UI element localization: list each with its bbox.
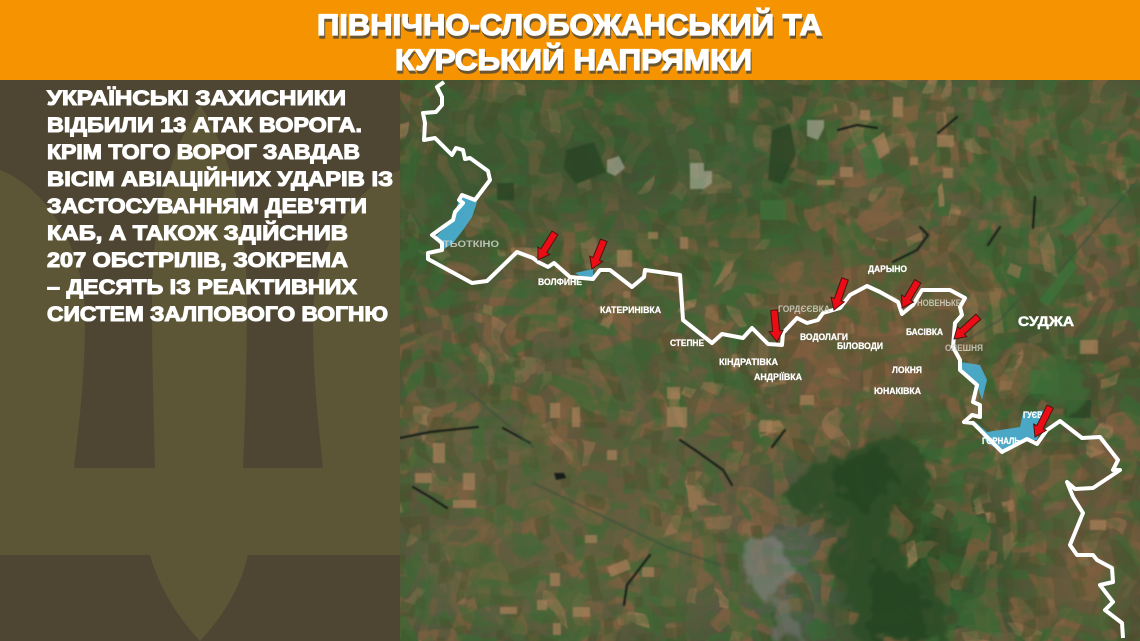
place labels: БІЛОВОДИ xyxy=(837,341,883,351)
place labels: ВОЛФИНЕ xyxy=(538,277,582,287)
water bodies xyxy=(435,195,1047,452)
rivers xyxy=(400,117,1138,605)
place labels: ОЛЕШНЯ xyxy=(945,343,983,354)
panel: text background with trident emblem xyxy=(0,80,400,641)
title: ПІВНІЧНО-СЛОБОЖАНСЬКИЙ ТА xyxy=(317,8,822,42)
place labels: ЮНАКІВКА xyxy=(874,386,921,396)
place labels: ГОРДЄЄВКА xyxy=(778,304,830,315)
body text: ЗАСТОСУВАННЯМ ДЕВ'ЯТИ xyxy=(47,195,367,218)
place labels xyxy=(443,239,1074,446)
body text: – ДЕСЯТЬ ІЗ РЕАКТИВНИХ xyxy=(47,276,357,299)
body text: ВІДБИЛИ 13 АТАК ВОРОГА. xyxy=(47,114,362,137)
place labels: ВОДОЛАГИ xyxy=(800,332,848,342)
place labels: НОВЕНЬКЕ xyxy=(917,298,961,309)
field mosaic textures xyxy=(400,80,1140,641)
place labels: ГОРНАЛЬ xyxy=(982,436,1020,446)
title xyxy=(317,8,822,77)
place labels: БАСІВКА xyxy=(906,327,943,337)
place labels: ЛОКНЯ xyxy=(892,365,922,375)
regional tints xyxy=(400,90,1130,630)
place labels: ТЬОТКІНО xyxy=(443,239,499,250)
place labels: ГУЄВО xyxy=(1023,410,1048,420)
title: КУРСЬКИЙ НАПРЯМКИ xyxy=(395,43,752,77)
satellite map xyxy=(400,80,1140,641)
place labels: СТЕПНЕ xyxy=(670,338,704,348)
red attack arrows xyxy=(532,229,1056,440)
header bar xyxy=(0,0,1140,80)
place labels: ДАРЬІНО xyxy=(868,264,907,274)
body text: СИСТЕМ ЗАЛПОВОГО ВОГНЮ xyxy=(47,303,388,326)
place labels: АНДРІЇВКА xyxy=(754,372,802,382)
body text: УКРАЇНСЬКІ ЗАХИСНИКИ xyxy=(47,87,346,110)
place labels: КАТЕРИНІВКА xyxy=(600,305,661,315)
place labels: СУДЖА xyxy=(1018,313,1074,329)
body text: ВІСІМ АВІАЦІЙНИХ УДАРІВ ІЗ xyxy=(47,167,393,191)
body text: 207 ОБСТРІЛІВ, ЗОКРЕМА xyxy=(47,249,348,272)
body text xyxy=(47,87,393,326)
border line xyxy=(423,82,1123,638)
body text: КАБ, А ТАКОЖ ЗДІЙСНИВ xyxy=(47,221,348,245)
body text: КРІМ ТОГО ВОРОГ ЗАВДАВ xyxy=(47,141,360,164)
icon: trident emblem xyxy=(0,105,400,641)
place labels: КІНДРАТІВКА xyxy=(719,357,778,367)
forest and city xyxy=(742,350,1095,640)
